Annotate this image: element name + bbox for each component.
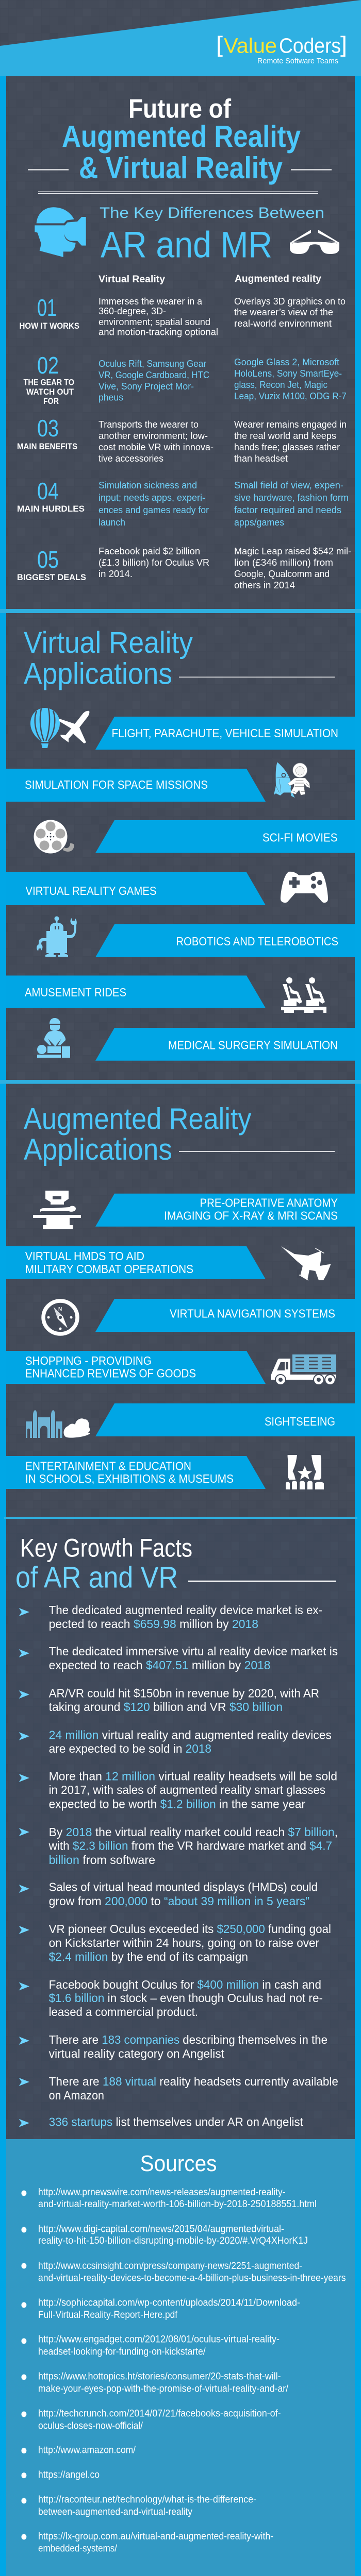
source 5: http://www.engadget.com/2012/08/01/oculus-virtual-reality- [38,2334,280,2345]
row 05 deals: BIGGEST DEALS [17,572,86,582]
icon: amusement ride seats [281,977,326,1013]
source 10: http://raconteur.net/technology/what-is-the-difference- [38,2495,256,2505]
source 8: http://www.amazon.com/ [38,2445,136,2456]
source 11: https://lx-group.com.au/virtual-and-augmented-reality-with- [38,2531,273,2542]
heading: key differences: The Key Differences Between [100,205,324,222]
row 05 deals: Magic Leap raised $542 mil- [234,546,351,556]
row 04 hurdles: Simulation sickness and [99,480,197,490]
banner: medical surgery: MEDICAL SURGERY SIMULATION [168,1039,338,1052]
banner: flight: FLIGHT, PARACHUTE, VEHICLE SIMULATION [111,726,338,740]
banner: sci-fi movies [95,820,355,853]
panel: sources [6,2139,355,2576]
row 05 deals: 05 [37,546,59,573]
logo: ValueCoders: Value [224,34,277,58]
row 05 deals: others in 2014 [234,580,295,590]
title: Future of [128,94,232,124]
icon: rocket and astronaut [274,762,310,798]
source 11 [21,2531,273,2554]
fact 9: Facebook bought Oculus for $400 million in cash and [49,1978,321,1991]
row 05 deals: in 2014. [99,569,133,579]
logo: ValueCoders: Remote Software Teams [257,57,338,65]
row 04 hurdles: MAIN HURDLES [17,504,85,514]
heading: Key Growth Facts: Key Growth Facts [20,1534,192,1563]
banner: navigation: VIRTULA NAVIGATION SYSTEMS [170,1307,335,1320]
icon: airplane [59,711,89,743]
row 04 hurdles: ences and games ready for [99,505,209,515]
icon: surgeon [37,1018,70,1058]
fact list [19,1603,338,2129]
source 11: embedded-systems/ [38,2544,118,2554]
row 02 gear: VR, Google Cardboard, HTC [99,370,209,380]
row 02 gear: THE GEAR TO [24,377,74,387]
left blue border [0,76,6,2576]
row 01 how it works: and motion-tracking optional [99,327,218,337]
source 2: reality-to-hit-150-billion-disrupting-mobile-by-2020/#.VrQ4XHorK1J [38,2235,308,2246]
source 6: make-your-eyes-pop-with-the-promise-of-virtual-reality-and-ar/ [38,2384,289,2395]
row 01 how it works: 360-degree, 3D- [99,306,166,316]
header banner [0,0,361,76]
banner: space missions: SIMULATION FOR SPACE MISSIONS [25,778,208,791]
fact 1: pected to reach $659.98 million by 2018 [49,1617,258,1631]
row 03 benefits: hands free; glasses rather [234,442,340,452]
banner: flight [95,717,355,750]
heading: Augmented Reality Applications: Augmented Reality [24,1103,252,1136]
logo: ValueCoders: ] [340,32,347,57]
source 6 [21,2371,289,2395]
row 02 gear: 02 [37,352,59,379]
fact 11: There are 188 virtual reality headsets currently available [49,2075,338,2088]
source 5: headset-looking-for-funding-on-kickstarte/ [38,2347,206,2358]
row 03 benefits: the real world and keeps [234,431,336,441]
banner: shopping [6,1351,266,1384]
source 10 [21,2495,256,2518]
row 03 benefits: Transports the wearer to [99,419,199,430]
row 01 how it works: the wearer’s view of the [234,307,333,317]
heading: Virtual Reality Applications: Applications [24,657,172,690]
banner: sightseeing: SIGHTSEEING [265,1415,335,1428]
source 3 [21,2261,346,2284]
source 5 [21,2334,280,2358]
heading: key differences [100,205,324,265]
fact 7: grow from 200,000 to “about 39 million in 5 years” [49,1894,309,1908]
row 03 benefits: cost mobile VR with innova- [99,442,214,452]
heading: Augmented Reality Applications [24,1103,335,1166]
row 02 gear [24,352,347,406]
separator band [4,1517,357,1519]
source 1 [21,2187,317,2210]
fact 1: The dedicated augmented reality device market is ex- [49,1603,322,1617]
row 01 how it works: Immerses the wearer in a [99,296,203,307]
row 01 how it works: Overlays 3D graphics on to [234,296,346,307]
banner: shopping: SHOPPING - PROVIDING [25,1354,152,1367]
fact 2: The dedicated immersive virtu al reality device market is [49,1645,338,1658]
source 2 [21,2224,308,2246]
fact 11: on Amazon [49,2089,104,2102]
banner: amusement rides: AMUSEMENT RIDES [25,986,126,999]
logo: ValueCoders [216,32,347,65]
heading: Key Growth Facts: of AR and VR [15,1561,178,1595]
fact 6: billion from software [49,1853,155,1867]
heading: Sources: Sources [140,2151,217,2176]
source 1: http://www.prnewswire.com/news-releases/augmented-reality- [38,2187,286,2198]
source 3: http://www.ccsinsight.com/press/company-news/2251-augmented- [38,2261,302,2272]
fact 1 [19,1603,322,1631]
heading: Key Growth Facts [15,1534,336,1595]
icon: gamepad [281,872,328,903]
banner: pre-operative imaging: PRE-OPERATIVE ANATOMY [200,1196,338,1210]
icon: VR headset head [35,207,86,257]
banner: entertainment and education: ENTERTAINMENT & EDUCATION [25,1459,191,1472]
source 2: http://www.digi-capital.com/news/2015/04/augmentedvirtual- [38,2224,284,2235]
row 04 hurdles: factor required and needs [234,505,341,515]
fact 5: in 2017, with sales of augmented reality smart glasses [49,1783,325,1797]
fact 3: AR/VR could hit $150bn in revenue by 2020, with AR [49,1687,319,1700]
icon: x-ray machine [33,1191,81,1229]
row 02 gear: HoloLens, Sony SmartEye- [234,368,342,379]
fact 10 [19,2033,327,2060]
fact 3 [19,1687,319,1714]
banner: robotics [95,924,355,957]
fact 6 [19,1825,338,1867]
heading: Virtual Reality Applications [24,626,335,690]
fact 2: expected to reach $407.51 million by 2018 [49,1658,270,1672]
icon: clouds [63,1418,90,1438]
fact 9 [19,1978,323,2019]
fact 8 [19,1922,331,1963]
fact 6: By 2018 the virtual reality market could reach $7 billion, [49,1825,338,1839]
fact 4: 24 million virtual reality and augmented reality devices [49,1728,332,1742]
row 02 gear: Vive, Sony Project Mor- [99,381,194,392]
title [28,94,332,194]
fact 8: on Kickstarter within 24 hours, going on to raise over [49,1936,319,1950]
column headers: Virtual Reality [99,274,165,285]
row 01 how it works [20,294,346,337]
row 01 how it works: 01 [37,294,57,321]
banner: robotics: ROBOTICS AND TELEROBOTICS [176,935,338,948]
icon: compass: N [58,1307,62,1312]
source 9: https://angel.co [38,2470,100,2481]
icon: truck [271,1354,336,1385]
row 03 benefits: than headset [234,453,288,464]
fact 5 [19,1770,337,1811]
fact 10: There are 183 companies describing themselves in the [49,2033,327,2046]
row 05 deals: Facebook paid $2 billion [99,546,200,556]
banner: military HMDs: VIRTUAL HMDS TO AID [25,1249,144,1263]
banner: medical surgery [95,1028,355,1061]
banner: navigation [95,1299,355,1332]
banner: shopping: ENHANCED REVIEWS OF GOODS [25,1367,196,1380]
icon: monument gate [26,1410,62,1438]
row 04 hurdles [17,478,349,528]
row 03 benefits [17,415,347,464]
fact 4: are expected to be sold in 2018 [49,1742,211,1755]
row 02 gear: pheus [99,393,123,403]
separator band [0,1080,361,1084]
column headers [99,274,321,285]
icon: smart glasses [290,230,339,254]
row 04 hurdles: 04 [37,478,59,504]
banner: military HMDs [6,1246,266,1279]
fact 3: taking around $120 billion and VR $30 billion [49,1700,283,1714]
fact 8: VR pioneer Oculus exceeded its $250,000 funding goal [49,1922,331,1936]
row 04 hurdles: apps/games [234,517,284,528]
banner: entertainment and education [6,1456,266,1489]
row 04 hurdles: sive hardware, fashion form [234,493,349,503]
fact 6: with $2.3 billion from the VR hardware market and $4.7 [48,1839,332,1853]
banner: sightseeing [95,1403,355,1436]
fact 8: $2.4 million by the end of its campaign [49,1950,248,1963]
row 02 gear: Oculus Rift, Samsung Gear [99,359,206,369]
row 05 deals [17,546,351,590]
fact 5: More than 12 million virtual reality headsets will be sold [49,1770,337,1783]
fact 2 [19,1645,338,1672]
row 04 hurdles: input; needs apps, experi- [99,493,205,503]
source 7: http://techcrunch.com/2014/07/21/facebooks-acquisition-of- [38,2409,281,2419]
row 01 how it works: environment; spatial sound [99,317,210,327]
fact 9: $1.6 billion in stock – even though Oculus had not re- [49,1991,323,2005]
row 03 benefits: 03 [37,415,59,442]
banner: pre-operative imaging [95,1194,355,1227]
row 02 gear: Leap, Vuzix M100, ODG R-7 [234,391,347,401]
row 05 deals: (£1.3 billion) for Oculus VR [99,557,209,568]
banner: amusement rides [6,976,266,1008]
row 04 hurdles: launch [99,517,125,528]
icon: compass [43,1301,77,1334]
heading: key differences: AR and MR [101,225,272,265]
source 7: oculus-closes-now-official/ [38,2421,143,2432]
source 1: and-virtual-reality-market-worth-106-billion-by-2018-250188551.html [38,2199,317,2210]
fact 10: virtual reality category on Angelist [49,2047,225,2060]
fact 7: Sales of virtual head mounted displays (HMDs) could [49,1880,318,1894]
banner: pre-operative imaging: IMAGING OF X-RAY & MRI SCANS [164,1209,338,1223]
row 03 benefits: tive accessories [99,453,163,464]
icon: fighter jet [281,1246,331,1280]
row 02 gear: FOR [43,396,59,406]
row 01 how it works: real-world environment [234,318,332,329]
row 02 gear: Google Glass 2, Microsoft [234,357,339,367]
column headers: Augmented reality [235,274,321,284]
banner: space missions [6,769,266,802]
source 10: between-augmented-and-virtual-reality [38,2507,192,2518]
comparison table [17,274,351,590]
fact 7 [19,1880,318,1908]
row 04 hurdles: Small field of view, expen- [234,480,343,490]
row 05 deals: Google, Qualcomm and [234,569,330,579]
heading: Augmented Reality Applications: Applications [24,1133,172,1166]
heading: Virtual Reality Applications: Virtual Reality [24,626,193,659]
banner: military HMDs: MILITARY COMBAT OPERATIONS [25,1262,193,1276]
fact 12: 336 startups list themselves under AR on Angelist [49,2115,304,2129]
fact 4 [19,1728,332,1755]
icon: robot [37,916,77,957]
logo: ValueCoders: Coders [279,34,341,58]
row 03 benefits: another environment; low- [99,431,208,441]
row 05 deals: lion (£346 million) from [234,557,333,568]
banner: VR games [6,872,266,905]
row 03 benefits: Wearer remains engaged in [234,419,347,430]
fact 5: expected to be worth $1.2 billion in the same year [49,1798,305,1811]
logo: ValueCoders: [ [216,32,223,57]
row 01 how it works: HOW IT WORKS [20,321,79,331]
right blue border [355,76,361,2576]
row 02 gear: WATCH OUT [26,387,74,397]
fact 11 [19,2075,338,2102]
banner: sci-fi movies: SCI-FI MOVIES [262,831,337,844]
icon: hot air balloon [30,708,60,748]
title: & Virtual Reality [79,151,283,185]
source 4: Full-Virtual-Reality-Report-Here.pdf [38,2310,178,2320]
banner: entertainment and education: IN SCHOOLS, EXHIBITIONS & MUSEUMS [25,1472,234,1485]
row 02 gear: glass, Recon Jet, Magic [234,380,327,390]
icon: theater stage [286,1455,324,1489]
panel: facts background tint [6,1519,355,2139]
source 4: http://sophiccapital.com/wp-content/uploads/2014/11/Download- [38,2298,300,2309]
source 7 [21,2409,281,2432]
icon: film reel [34,820,74,853]
source 4 [21,2298,300,2320]
title: Augmented Reality [62,120,301,154]
row 03 benefits: MAIN BENEFITS [17,442,77,451]
banner: VR games: VIRTUAL REALITY GAMES [26,884,157,897]
separator band [0,609,361,613]
source 6: https://www.hottopics.ht/stories/consumer/20-stats-that-will- [38,2371,281,2382]
fact 9: leased a commercial product. [49,2005,198,2019]
